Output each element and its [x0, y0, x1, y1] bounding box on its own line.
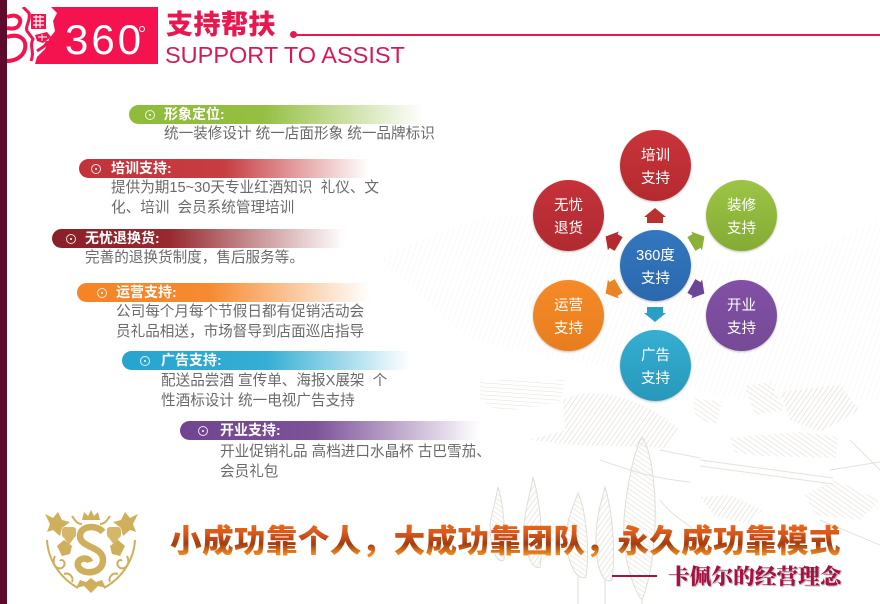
circle: 培训支持 — [620, 130, 691, 201]
text: 培训支持: 提供为期15~30天专业红酒知识 礼仪、文 — [111, 180, 379, 196]
item: 广告支持 — [122, 351, 404, 409]
crest scrolls and shield edge — [47, 516, 135, 588]
text: 运营支持 — [116, 303, 364, 340]
bar: 广告支持: 广告支持: — [161, 352, 222, 368]
text: 运营支持: 公司每个月每个节假日都有促销活动会 — [116, 304, 364, 320]
arrows between hub and circles — [606, 208, 704, 322]
text: 形象定位: 统一装修设计 统一店面形象 统一品牌标识 — [164, 126, 435, 142]
item: 培训支持 — [79, 159, 379, 216]
bar: 开业支持: 开业支持: — [220, 422, 281, 438]
text: 培训支持 — [111, 179, 379, 216]
circle: 开业支持 — [706, 280, 777, 351]
item: 无忧退换货 — [52, 229, 338, 266]
circle: 无忧退货 — [533, 180, 604, 251]
circle: 培训支持: 培训 — [641, 148, 670, 164]
text: 广告支持: 配送品尝酒 宣传单、海报X展架 个 — [161, 373, 387, 389]
text: 广告支持: 性酒标设计 统一电视广告支持 — [161, 393, 355, 409]
text: 开业支持: 会员礼包 — [220, 464, 278, 480]
text: 开业支持 — [220, 443, 491, 480]
bar: 培训支持 — [79, 159, 369, 178]
text: 运营支持: 员礼品相送，市场督导到店面巡店指导 — [116, 324, 364, 340]
circle: 开业支持: 支持 — [727, 321, 756, 337]
circle: 360度支持 hub — [620, 230, 691, 301]
circle: 装修支持: 支持 — [727, 221, 756, 237]
circle: 无忧退货: 无忧 — [554, 198, 583, 214]
circle: 360度支持 hub: 支持 — [641, 271, 670, 287]
text: 培训支持: 化、培训 会员系统管理培训 — [111, 200, 294, 216]
bar: 无忧退换货 — [52, 229, 345, 248]
circle: 运营支持 — [533, 280, 604, 351]
bar: 开业支持 — [180, 421, 480, 440]
circle: 无忧退货: 退货 — [554, 221, 583, 237]
item: 形象定位 — [129, 105, 435, 142]
bar: 运营支持: 运营支持: — [116, 284, 177, 300]
logo number: 360 — [65, 16, 144, 63]
circle: 运营支持: 运营 — [554, 298, 583, 314]
logo degree ring — [139, 26, 145, 32]
crest leaves and crown — [45, 510, 138, 593]
heading: Chinese title: 支持帮扶 — [166, 10, 276, 40]
text: 无忧退换货: 完善的退换货制度，售后服务等。 — [85, 250, 304, 266]
logo ornament — [7, 7, 57, 64]
header rule with dot — [290, 31, 880, 38]
bar: 广告支持 — [122, 351, 410, 370]
heading: English subtitle: SUPPORT TO ASSIST — [165, 42, 405, 68]
bar: 无忧退换货: 无忧退换货: — [85, 230, 160, 246]
circle: 广告支持 — [620, 330, 691, 401]
cypress trees — [490, 437, 655, 604]
text: 开业支持: 开业促销礼品 高档进口水晶杯 古巴雪茄、 — [220, 444, 491, 460]
bar: 培训支持: 培训支持: — [111, 160, 172, 176]
circle: 装修支持 — [706, 180, 777, 251]
bar: 形象定位 — [129, 105, 424, 124]
circle: 广告支持: 广告 — [641, 348, 670, 364]
bar: 运营支持 — [77, 283, 370, 302]
attribution: 卡佩尔的经营理念 — [668, 565, 842, 589]
bar: 形象定位: 形象定位: — [164, 106, 225, 122]
circle: 开业支持: 开业 — [727, 298, 756, 314]
left edge stripe — [0, 0, 7, 604]
circle: 运营支持: 支持 — [554, 321, 583, 337]
item: 开业支持 — [180, 421, 491, 480]
circle: 广告支持: 支持 — [641, 371, 670, 387]
text: 广告支持 — [161, 372, 387, 409]
item: 运营支持 — [77, 283, 364, 340]
logo: gold crest — [45, 510, 138, 593]
header logo: 360 banner — [7, 7, 158, 64]
circle: 360度支持 hub: 360度 — [636, 248, 675, 264]
crest S monogram — [78, 527, 103, 572]
diagram: 360 support hub — [532, 130, 778, 403]
circle: 培训支持: 支持 — [641, 171, 670, 187]
crest grapes — [62, 527, 121, 545]
circle: 装修支持: 装修 — [727, 198, 756, 214]
slogan: 小成功靠个人，大成功靠团队，永久成功靠模式 — [170, 523, 841, 559]
